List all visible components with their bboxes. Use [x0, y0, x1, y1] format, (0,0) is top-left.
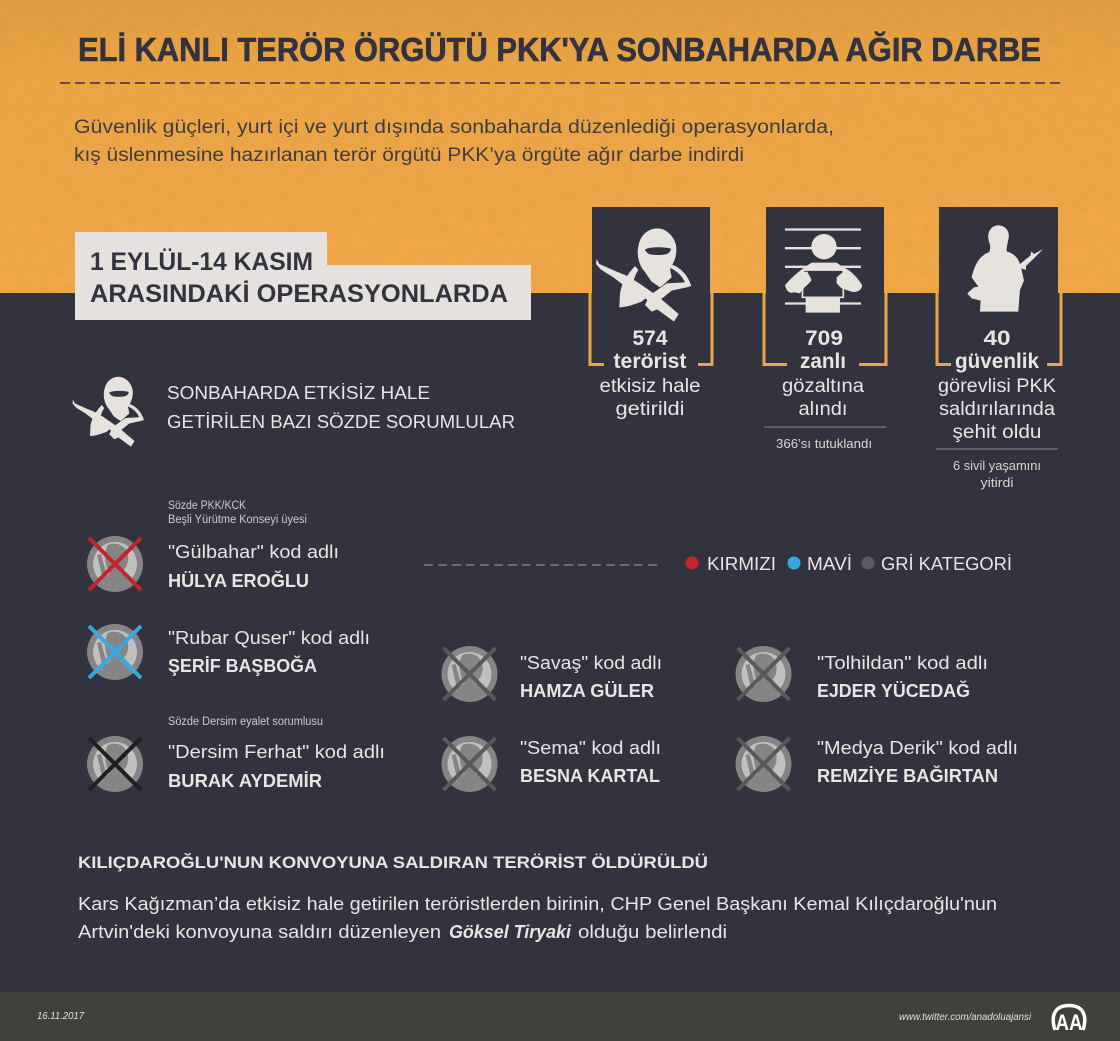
date: 16.11.2017 [37, 1011, 84, 1022]
stat card: security personnel: 6 sivil yaşamını [953, 458, 1041, 473]
person: Besna Kartal: "Sema" kod adlı [520, 738, 661, 758]
intro text: kış üslenmesine hazırlanan terör örgütü PKK’ya örgüte ağır darbe indirdi [74, 145, 744, 166]
person: Şerif Başboğa: "Rubar Quser" kod adlı [168, 628, 370, 648]
icon: masked fighter [596, 228, 691, 322]
person: Şerif Başboğa: ŞERİF BAŞBOĞA [168, 655, 317, 676]
person: Şerif Başboğa [87, 624, 370, 680]
stat card: detained: alındı [798, 399, 848, 420]
twitter address: www.twitter.com/anadoluajansi [899, 1012, 1032, 1023]
person: Ejder Yücedağ: EJDER YÜCEDAĞ [817, 680, 970, 701]
section heading icon: fighter [72, 377, 144, 447]
person: Hülya Eroğlu: Sözde PKK/KCK [168, 500, 246, 512]
stat card: detained: 366’sı tutuklandı [776, 436, 872, 451]
legend: categories [686, 554, 1012, 574]
person: Hamza Güler [442, 646, 662, 702]
intro text [74, 117, 834, 166]
stat card: security personnel: görevlisi PKK [938, 376, 1056, 397]
person: Burak Aydemir: Sözde Dersim eyalet sorumlusu [168, 716, 323, 728]
person: Hülya Eroğlu: Beşli Yürütme Konseyi üyesi [168, 514, 307, 526]
section heading: SONBAHARDA ETKİSİZ HALE [167, 383, 430, 403]
bottom note text: Artvin'deki konvoyuna saldırı düzenleyen [78, 922, 441, 942]
legend: categories: GRİ KATEGORİ [881, 554, 1012, 574]
bottom note text: Göksel Tiryaki [449, 922, 572, 942]
stat card: terrorists: 574 [632, 327, 668, 350]
person: Burak Aydemir [87, 716, 385, 792]
stat card: detained: gözaltına [782, 376, 864, 397]
stat card: security personnel: 40 [984, 327, 1010, 350]
stat card: security personnel [936, 207, 1061, 490]
person: Besna Kartal [442, 736, 661, 792]
dashed connector [424, 564, 660, 566]
person: Hülya Eroğlu: "Gülbahar" kod adlı [168, 542, 339, 562]
title: ELİ KANLI TERÖR ÖRGÜTÜ PKK'YA SONBAHARDA AĞIR DARBE [78, 31, 1041, 68]
intro text: Güvenlik güçleri, yurt içi ve yurt dışında sonbaharda düzenlediği operasyonlarda, [74, 117, 834, 138]
bottom note heading: KILIÇDAROĞLU'NUN KONVOYUNA SALDIRAN TERÖRİST ÖLDÜRÜLDÜ [78, 853, 708, 872]
stat card: detained [764, 207, 886, 451]
date label: ARASINDAKİ OPERASYONLARDA [90, 280, 508, 308]
person: Ejder Yücedağ [736, 646, 988, 702]
person: Hülya Eroğlu [87, 500, 339, 592]
legend: categories: KIRMIZI [707, 554, 776, 574]
person: Remziye Bağırtan [736, 736, 1018, 792]
footer [0, 992, 1120, 1041]
stat card: terrorists: getirildi [616, 399, 684, 420]
logo: AA: AA [1056, 1010, 1083, 1035]
stat card: security personnel: saldırılarında [939, 399, 1055, 420]
stat card: terrorists: etkisiz hale [600, 376, 700, 397]
date label: 1 EYLÜL-14 KASIM [90, 247, 313, 276]
person: Remziye Bağırtan: "Medya Derik" kod adlı [817, 738, 1018, 758]
orange top band [0, 0, 1120, 293]
date label [75, 232, 531, 320]
person: Hamza Güler: "Savaş" kod adlı [520, 653, 662, 673]
person: Hülya Eroğlu: HÜLYA EROĞLU [168, 570, 309, 591]
stat card: detained: zanlı [800, 350, 846, 373]
icon: detainee [785, 228, 862, 313]
bottom note text: olduğu belirlendi [578, 922, 727, 942]
stat card: security personnel: şehit oldu [952, 422, 1042, 443]
icon: soldier [967, 225, 1043, 312]
stat card: detained: 709 [805, 327, 843, 350]
legend: categories: MAVİ [807, 554, 852, 574]
section heading: GETİRİLEN BAZI SÖZDE SORUMLULAR [167, 412, 515, 432]
person: Ejder Yücedağ: "Tolhildan" kod adlı [817, 653, 988, 673]
stat card: security personnel: yitirdi [980, 475, 1014, 490]
bottom note text: Kars Kağızman’da etkisiz hale getirilen teröristlerden birinin, CHP Genel Başkanı Kemal Kılıçdaroğlu'nun [78, 894, 997, 914]
person: Burak Aydemir: BURAK AYDEMİR [168, 771, 322, 791]
person: Burak Aydemir: "Dersim Ferhat" kod adlı [168, 742, 385, 762]
section heading [167, 383, 515, 432]
stat card: security personnel: güvenlik [955, 350, 1039, 373]
person: Hamza Güler: HAMZA GÜLER [520, 681, 654, 701]
bottom note text [78, 894, 997, 942]
person: Besna Kartal: BESNA KARTAL [520, 766, 660, 786]
person: Remziye Bağırtan: REMZİYE BAĞIRTAN [817, 765, 998, 786]
stat card: terrorists: terörist [614, 350, 686, 373]
stat card: terrorists [590, 207, 712, 420]
